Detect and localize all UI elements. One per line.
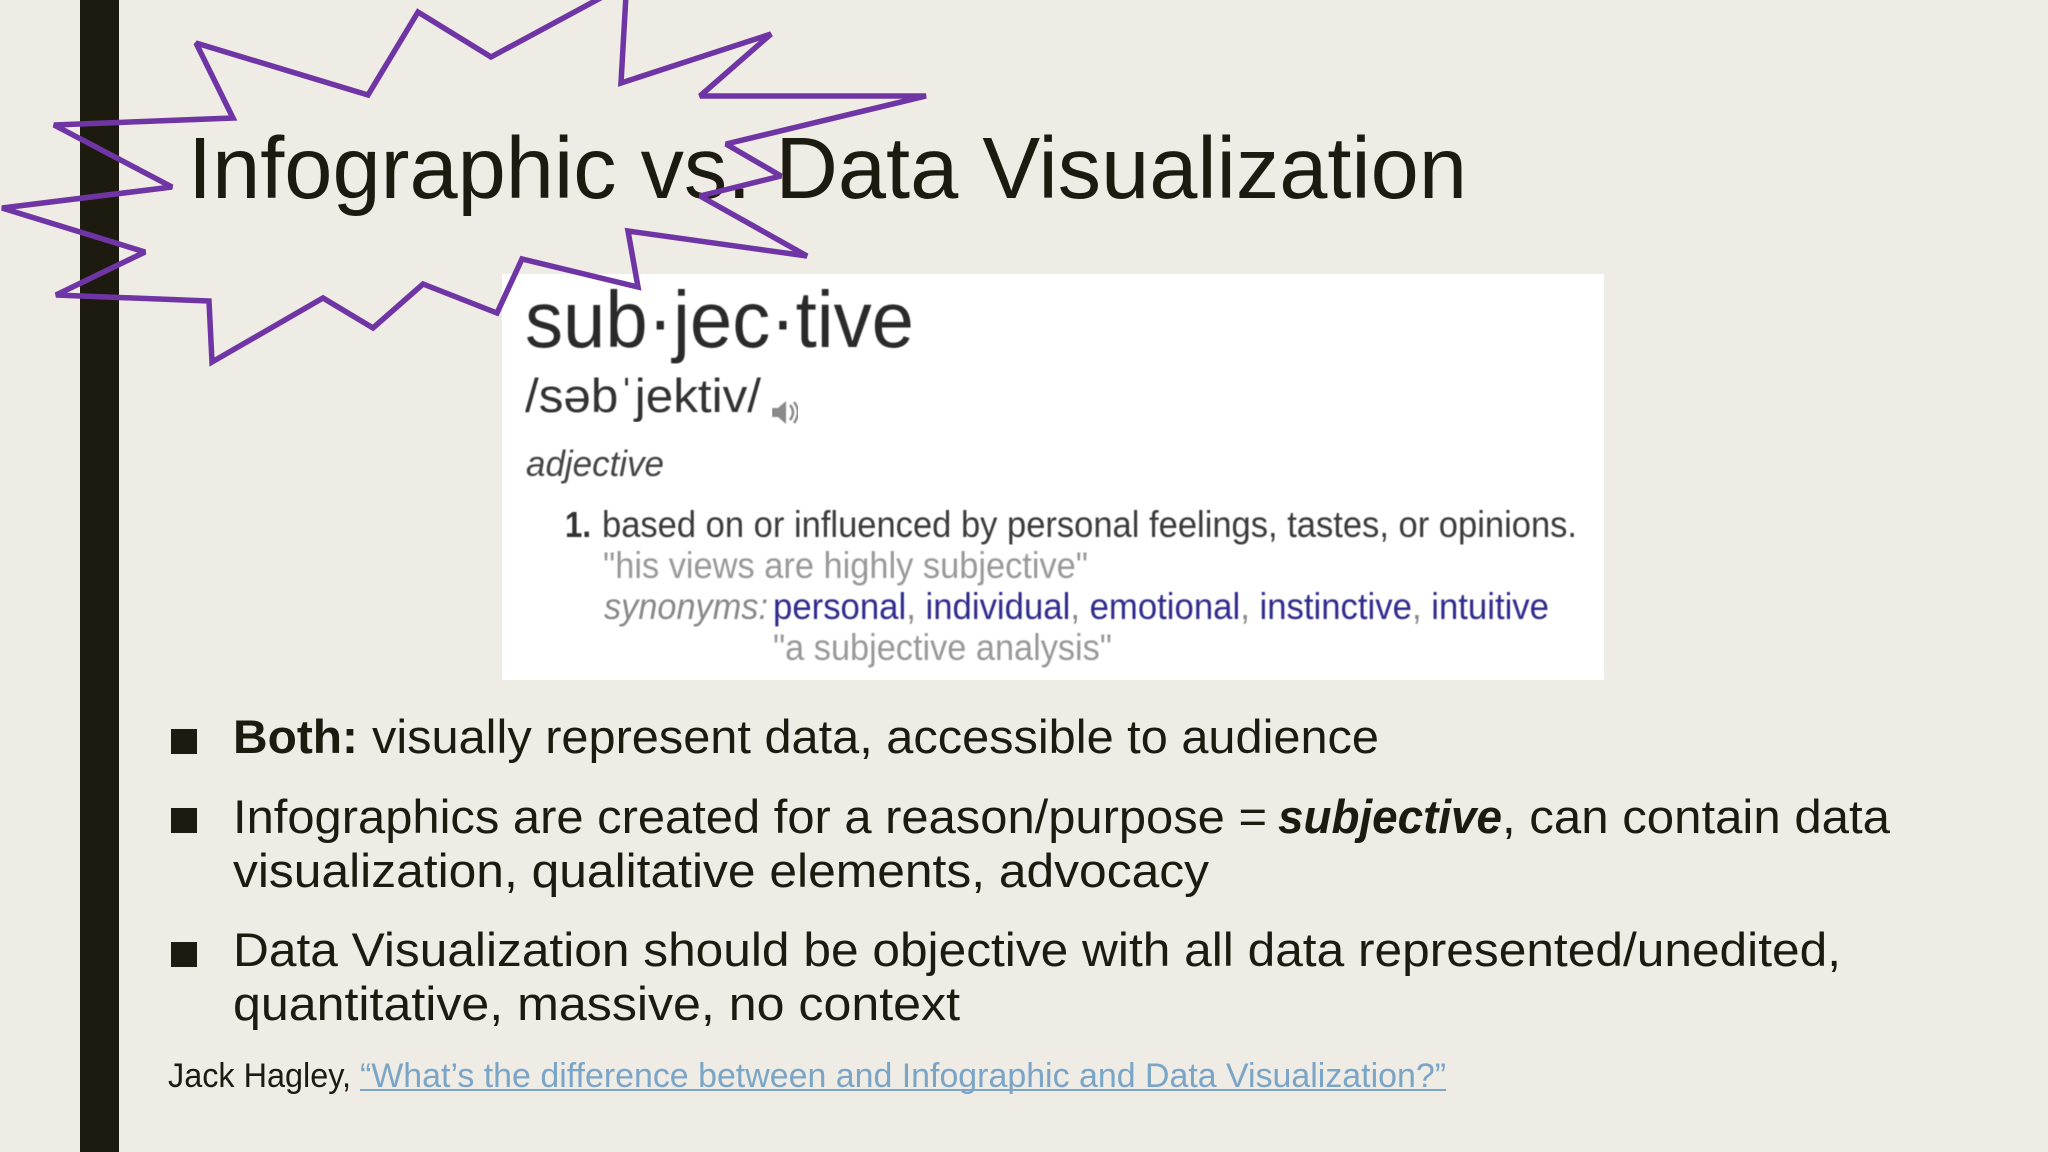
purple starburst outline	[2, 0, 926, 362]
bullet marker 3	[171, 942, 197, 967]
usage example: "a subjective analysis"	[773, 627, 1112, 668]
bullet 3 second line: quantitative, massive, no context	[233, 977, 960, 1030]
citation author: Jack Hagley,	[168, 1057, 351, 1095]
definition image panel	[502, 274, 1604, 680]
bullet 1 label: Both:	[233, 710, 358, 763]
bullet marker 2	[171, 808, 197, 833]
part of speech: adjective	[526, 443, 664, 484]
bullet list	[171, 710, 1891, 1030]
pronunciation: /səbˈjektiv/	[525, 369, 762, 422]
definition number: 1.	[565, 504, 591, 545]
bullet 2 text: Infographics are created for a reason/purpose =	[233, 790, 1267, 843]
left vertical bar	[80, 0, 119, 1152]
example sentence: "his views are highly subjective"	[603, 545, 1088, 586]
synonyms list: personal, individual, emotional, instinctive, intuitive	[773, 586, 1549, 627]
bullet marker 1	[171, 729, 197, 754]
bullet 1 text: visually represent data, accessible to audience	[372, 710, 1379, 763]
bullet 2 second line: visualization, qualitative elements, advocacy	[233, 844, 1210, 897]
icon: speaker	[772, 401, 798, 424]
citation link: “What’s the difference between and Infographic and Data Visualization?”	[360, 1057, 1446, 1095]
bullet 2 emphasis: subjective	[1278, 790, 1502, 843]
synonyms label: synonyms:	[604, 586, 768, 627]
bullet 2 continuation: , can contain data	[1502, 790, 1891, 843]
citation	[168, 1057, 1446, 1095]
title: Infographic vs. Data Visualization	[188, 120, 1467, 217]
citation underline	[360, 1089, 1446, 1091]
bullet 3 text: Data Visualization should be objective with all data represented/unedited,	[233, 923, 1841, 976]
definition text: based on or influenced by personal feelings, tastes, or opinions.	[602, 504, 1577, 545]
headword: sub·jec·tive	[525, 275, 914, 364]
